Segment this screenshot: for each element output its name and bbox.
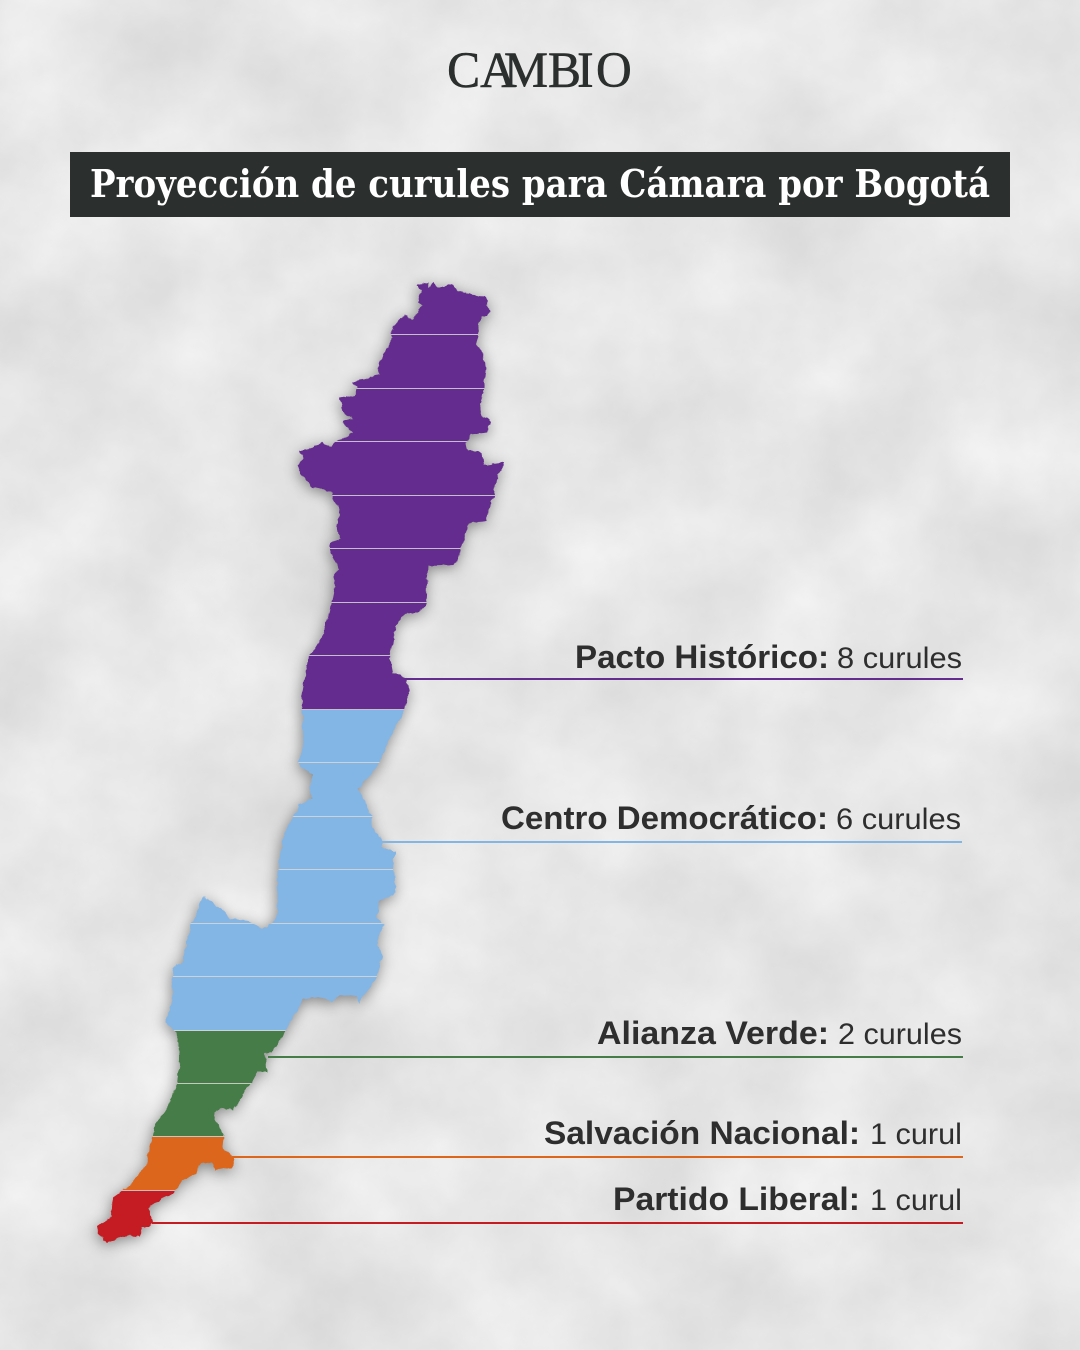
label: Partido Liberal: 1 curul [870,1184,962,1217]
label: Pacto Histórico: 8 curules [837,642,962,675]
band: Pacto Histórico, 8 seats [280,275,520,710]
logo: CAMBIO: CAMBIO [447,41,632,98]
label: Salvación Nacional: Salvación Nacional: [544,1115,860,1151]
band: Salvación Nacional, 1 seat [120,1137,245,1190]
label: Alianza Verde: Alianza Verde: [597,1015,829,1051]
title banner [70,152,1010,217]
band: Partido Liberal, 1 seat [90,1190,190,1250]
label: Salvación Nacional [232,1115,963,1158]
label: Pacto Histórico [405,639,963,680]
label: Centro Democrático [380,800,962,843]
label: Pacto Histórico: Pacto Histórico: [575,639,829,675]
label: Salvación Nacional: 1 curul [870,1118,962,1151]
label: Partido Liberal [152,1181,963,1224]
label: Alianza Verde: 2 curules [838,1018,962,1051]
label: Centro Democrático: Centro Democrático: [501,800,828,836]
title banner: Proyección de curules para Cámara por Bogotá [90,161,990,206]
label: Centro Democrático: 6 curules [836,803,961,836]
label: Alianza Verde [268,1015,963,1058]
label: Partido Liberal: Partido Liberal: [613,1181,860,1217]
band: Alianza Verde, 2 seats [140,1031,300,1137]
band: Centro Democrático, 6 seats [150,710,410,1031]
map: Bogotá seats as coloured bands [90,275,520,1250]
